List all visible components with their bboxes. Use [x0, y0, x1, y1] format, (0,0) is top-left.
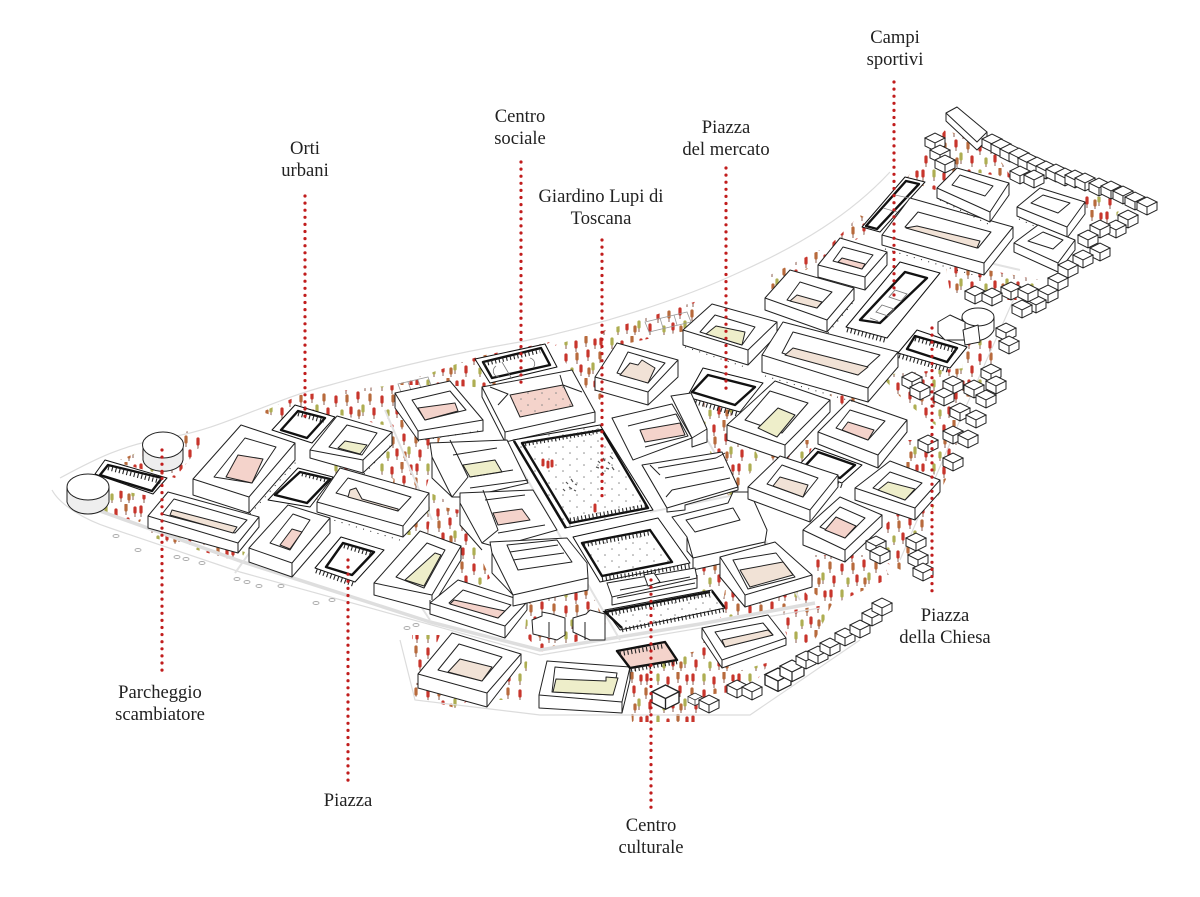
large building north-east [882, 198, 1013, 278]
courtyard wing west bottom [490, 538, 588, 606]
courtyard wing east of garden [642, 452, 738, 512]
long strip south [605, 590, 725, 630]
orti urbani strip [272, 405, 335, 443]
long bar house row north [946, 107, 987, 150]
giardino Lupi di Toscana [513, 425, 653, 528]
red dotted leader: Campi sportivi [892, 82, 896, 300]
small houses south-east [652, 598, 892, 713]
building below southern square [607, 568, 697, 605]
courtyard wing west top [430, 440, 528, 497]
small houses north-east row [925, 133, 1157, 215]
parcheggio scambiatore strip [95, 460, 167, 494]
building low south-west [418, 633, 521, 707]
label: Parcheggio scambiatore: Parcheggio [118, 682, 202, 703]
car park cylinders [67, 432, 184, 514]
label: Orti urbani: urbani [281, 160, 329, 181]
label: Piazza: Piazza [324, 790, 372, 811]
building block east south [748, 456, 838, 522]
red dotted leader: Giardino Lupi di Toscana [600, 240, 604, 497]
building east of large block [1014, 225, 1075, 272]
small east strip [797, 448, 862, 486]
label: Piazza della Chiesa: Piazza [921, 605, 969, 626]
building block long [317, 468, 429, 541]
market square strip [687, 368, 763, 415]
building block south-east tan [720, 542, 812, 607]
parked cars along road [113, 534, 419, 630]
label: Piazza del mercato: Piazza [702, 117, 750, 138]
road outlines [52, 172, 1020, 715]
building block southwest [148, 492, 259, 553]
building block far east olive [855, 461, 940, 520]
courtyard wing west middle [460, 490, 557, 550]
building block north-east pink [818, 238, 887, 290]
red dotted leader: Piazza della Chiesa [930, 328, 934, 597]
campi sportivi south strip [846, 262, 940, 341]
building block east large [727, 381, 830, 460]
centro sociale building [482, 370, 595, 442]
red dotted leader: Piazza del mercato [724, 168, 728, 389]
building block west large [193, 425, 296, 514]
courtyard wing south-east of garden [672, 492, 767, 570]
centro culturale strip [617, 642, 677, 670]
building low south [539, 661, 630, 713]
small central plaza west [268, 468, 333, 507]
label: Parcheggio scambiatore: scambiatore [115, 704, 205, 725]
label: Campi sportivi: Campi [870, 27, 920, 48]
label: Centro sociale: sociale [494, 128, 546, 149]
long building with courtyard north-east [762, 322, 898, 406]
basketball court icons [398, 312, 691, 392]
building block beside orti [310, 416, 392, 474]
red dotted leader: Parcheggio scambiatore [160, 450, 164, 675]
label: Centro culturale: culturale [618, 837, 684, 858]
building block south centre-west [249, 505, 330, 577]
label: Piazza del mercato: del mercato [682, 139, 770, 160]
church rotunda and buildings [938, 308, 994, 345]
cross shaped buildings [532, 610, 605, 640]
piazza del mercato building [683, 304, 777, 368]
label: Piazza della Chiesa: della Chiesa [899, 627, 991, 648]
building block pink south-east [803, 497, 882, 562]
building top north-east [937, 168, 1009, 225]
label: Centro culturale: Centro [626, 815, 676, 836]
building block east pink [818, 400, 907, 468]
trees and vegetation clusters [98, 130, 1125, 722]
label: Centro sociale: Centro [495, 106, 545, 127]
southern square strip [573, 518, 690, 582]
small houses east cluster [866, 210, 1138, 581]
label: Giardino Lupi di Toscana: Giardino Lupi di [539, 186, 663, 207]
label: Orti urbani: Orti [290, 138, 320, 159]
building block north pink [395, 381, 484, 441]
campi sportivi north strip [862, 177, 925, 232]
building block olive [374, 531, 461, 610]
red dotted leader: Centro culturale [649, 580, 653, 810]
red dotted leader: Piazza [346, 560, 350, 785]
label: Giardino Lupi di Toscana: Toscana [571, 208, 631, 229]
label: Campi sportivi: sportivi [867, 49, 923, 70]
building far north-east [1017, 188, 1085, 241]
building block north-east tan [765, 270, 855, 333]
chiesa strip [898, 330, 967, 371]
piazza strip [315, 537, 384, 585]
courtyard wing north of garden right [612, 393, 707, 460]
red dotted leader: Centro sociale [519, 162, 523, 384]
red dotted leader: Orti urbani [303, 196, 307, 418]
centro sociale sports court [475, 344, 557, 383]
building low south-east [702, 615, 786, 668]
building block pink south [430, 580, 527, 638]
building block north centre [595, 343, 678, 405]
